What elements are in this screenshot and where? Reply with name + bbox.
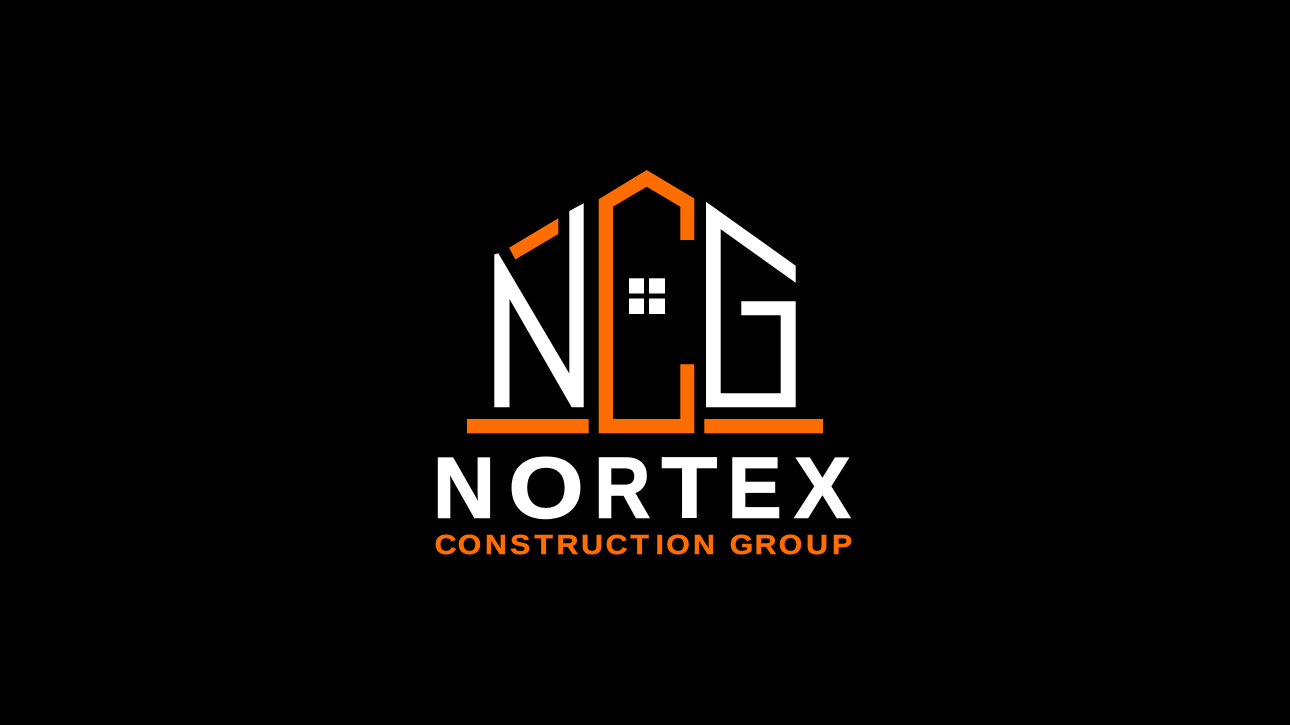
icon: house window [629,278,665,314]
icon: right orange base bar [704,419,823,433]
icon: house monogram NCG [467,170,823,433]
icon: orange roof slash over N [509,218,558,260]
subtitle: CONSTRUCTION GROUP: CONSTRUCTION GROUP [435,530,852,561]
icon: left orange base bar [467,419,589,433]
icon: white letter N [494,203,584,407]
title: NORTEX: N [433,441,495,537]
title: NORTEX: R [594,441,651,537]
icon: white letter G [706,202,796,407]
title: NORTEX: X [794,440,851,537]
icon: orange letter C with roof peak [599,170,694,433]
title: NORTEX [433,439,851,537]
title: NORTEX: T [662,440,717,536]
title: NORTEX: O [508,440,584,536]
title: NORTEX: E [728,439,782,536]
